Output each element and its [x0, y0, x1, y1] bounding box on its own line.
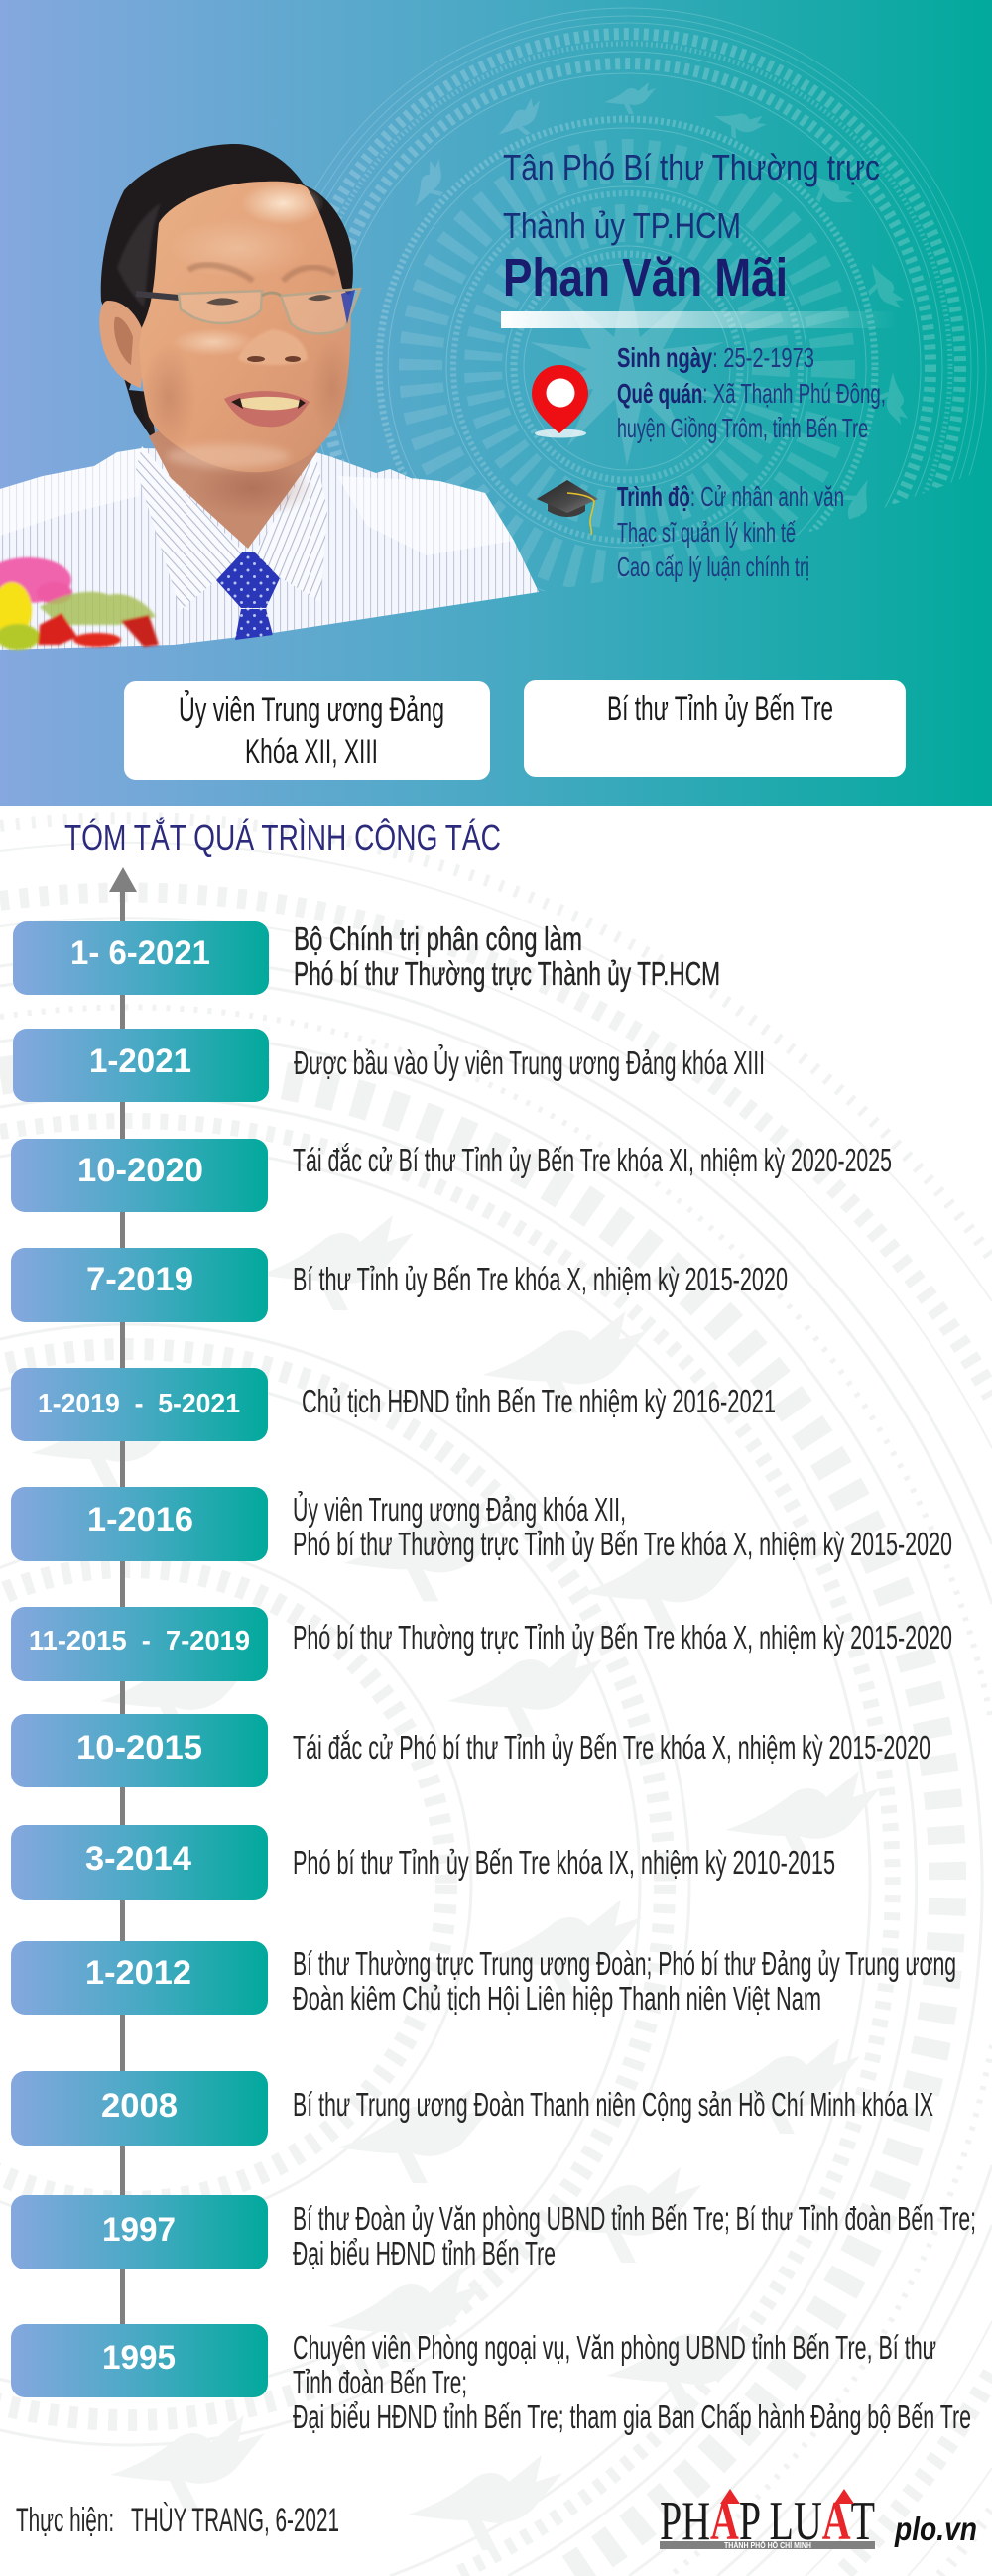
entry: 1-2021: 1-2021 [89, 1043, 191, 1080]
text: education: Thạc sĩ quản lý kinh tế [617, 517, 796, 548]
card: central committee [124, 681, 490, 780]
entry: 1997 [11, 2195, 976, 2271]
entry: 1-2012 [11, 1941, 956, 2017]
logo: Pháp Luật: PHAP LUAT [660, 2491, 875, 2552]
face [139, 182, 351, 472]
entry: 1-6-2021: 1- 6-2021 [70, 934, 210, 972]
entry: 10-2015 [11, 1714, 930, 1787]
entry: 1-6-2021: Phó bí thư Thường trực Thành ủy TP.HCM [294, 955, 720, 992]
glasses [136, 294, 179, 298]
icon: graduation cap [537, 480, 598, 535]
entry: 1-2021 [13, 1029, 765, 1102]
shirt [0, 448, 539, 650]
mouth [224, 391, 310, 427]
ear [99, 301, 145, 388]
name heading: Phan Văn Mãi [503, 248, 788, 307]
entry: 1-2019 to 5-2021: 1-2019 - 5-2021 [38, 1388, 240, 1418]
entry: 1-2016: Ủy viên Trung ương Đảng khóa XII, [293, 1491, 626, 1528]
heading: new position: Thành ủy TP.HCM [503, 205, 741, 246]
icon: location pin [532, 365, 588, 438]
entry: 1-2016 [11, 1487, 952, 1562]
entry: 11-2015 to 7-2019: 11-2015 - 7-2019 [29, 1625, 250, 1656]
timeline arrow [109, 867, 137, 2326]
heading: new position: Tân Phó Bí thư Thường trực [503, 147, 880, 187]
text: birth and hometown: Sinh ngày: 25-2-1973 [617, 342, 814, 373]
entry: 1-6-2021: Bộ Chính trị phân công làm [294, 920, 582, 957]
nose [238, 329, 308, 365]
entry: 2008 [11, 2071, 933, 2146]
entry: 1995: Tỉnh đoàn Bến Tre; [293, 2364, 467, 2400]
section heading: TÓM TẮT QUÁ TRÌNH CÔNG TÁC [64, 816, 501, 858]
text: birth and hometown [617, 342, 886, 443]
entry: 7-2019: 7-2019 [86, 1261, 193, 1298]
text: birth and hometown: Quê quán: Xã Thạnh Phú Đông, [617, 378, 886, 409]
card: provincial secretary: Bí thư Tỉnh ủy Bến Tre [607, 690, 833, 728]
portrait photo illustration [0, 144, 539, 650]
heading: new position [503, 147, 880, 246]
entry: 10-2015: 10-2015 [76, 1729, 202, 1767]
entry: 7-2019 [11, 1248, 788, 1322]
entry: 1-2019 to 5-2021 [11, 1368, 776, 1441]
entry: 1997: Đại biểu HĐND tỉnh Bến Tre [293, 2235, 556, 2271]
card: central committee: Ủy viên Trung ương Đảng [179, 691, 444, 729]
neck [149, 407, 337, 549]
entry: 1997: 1997 [102, 2211, 176, 2249]
entry: 1-2012: 1-2012 [85, 1954, 191, 1992]
entry: 1995: 1995 [102, 2339, 176, 2377]
text: education [617, 481, 844, 582]
text: education: Cao cấp lý luận chính trị [617, 552, 809, 582]
lower section drum pattern [0, 818, 992, 2576]
entry: 1995 [11, 2324, 971, 2435]
entry: 2008: 2008 [101, 2087, 178, 2125]
card: provincial secretary [524, 680, 906, 777]
entry: 1-2016: 1-2016 [87, 1501, 193, 1538]
credit line: Thực hiện: THÙY TRANG, 6-2021 [16, 2502, 339, 2539]
eyebrows and eyes [188, 265, 253, 281]
entry: 3-2014 [11, 1825, 835, 1900]
entry: 1-6-2021 [13, 920, 720, 995]
collar [136, 446, 243, 610]
entry: 3-2014: 3-2014 [85, 1840, 191, 1878]
text: education: Trình độ: Cử nhân anh văn [617, 481, 844, 512]
hair front [117, 203, 161, 307]
tie [216, 552, 280, 608]
drum pattern in header [313, 8, 986, 595]
entry: 10-2020: 10-2020 [77, 1152, 203, 1189]
entry: 11-2015 to 7-2019 [11, 1607, 952, 1681]
card: central committee: Khóa XII, XIII [245, 733, 378, 771]
header background panel [0, 0, 992, 806]
entry: 10-2020 [11, 1139, 892, 1212]
flowers [0, 557, 159, 650]
hair silhouette [101, 144, 353, 446]
logo: plo.vn: plo.vn [894, 2511, 977, 2547]
logo: Pháp Luật: THÀNH PHỐ HỒ CHÍ MINH [724, 2540, 811, 2550]
